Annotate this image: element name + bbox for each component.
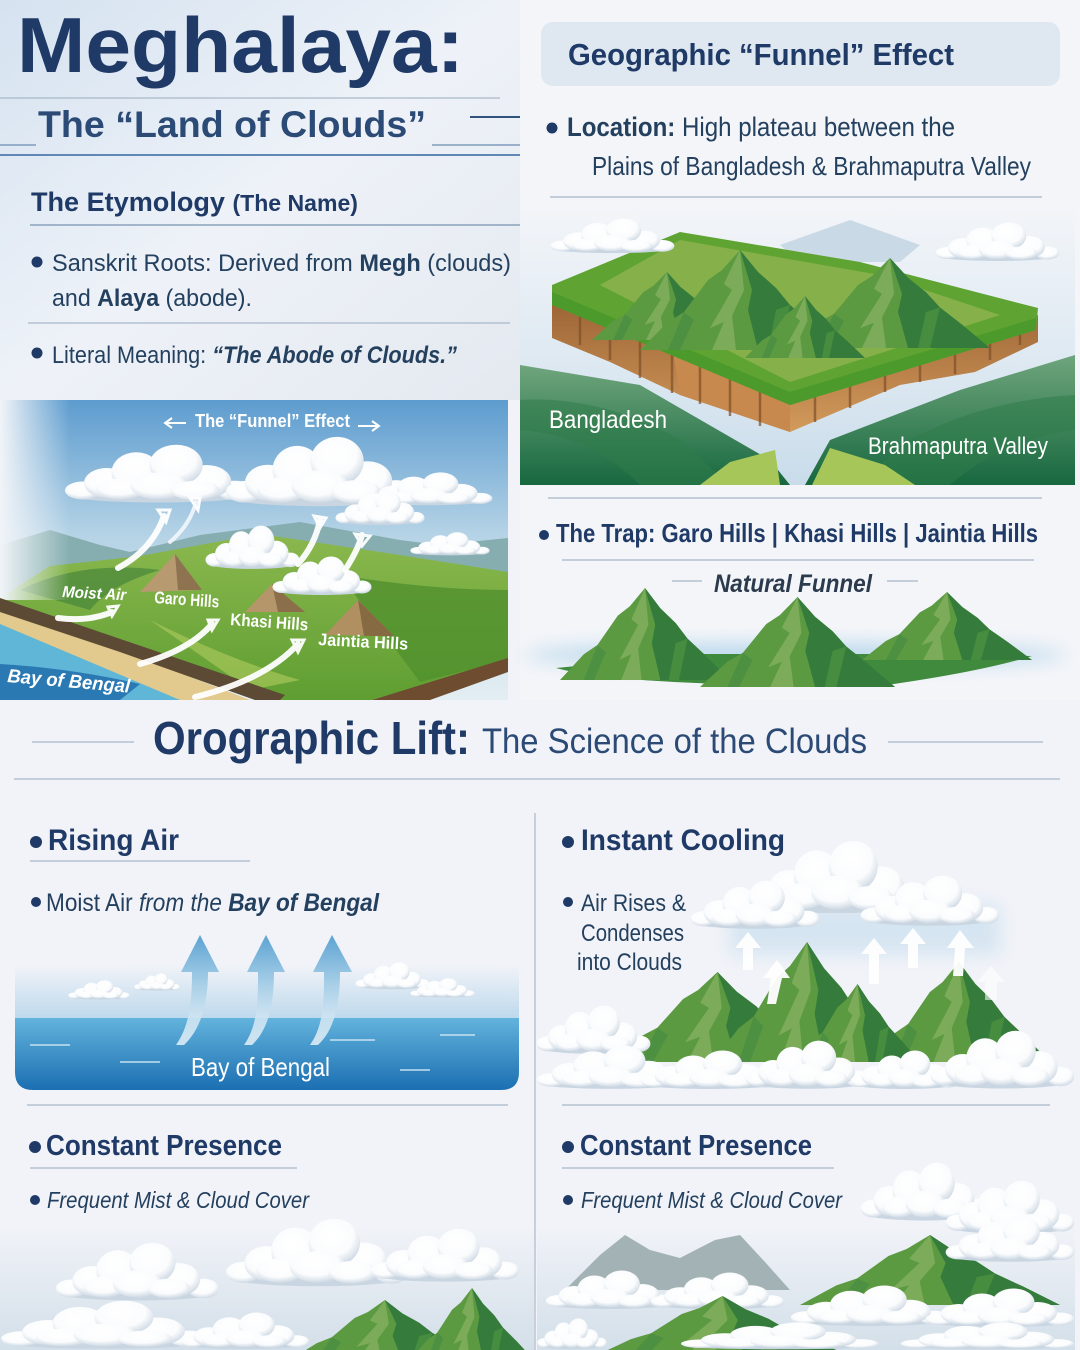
plateau top — [552, 232, 1038, 405]
illustration: misty hills left — [0, 1219, 534, 1350]
arrows: rising air — [176, 935, 352, 1045]
text: air rises: Condenses — [581, 920, 684, 947]
labels: Bangladesh — [549, 406, 667, 434]
cliffs — [552, 300, 1038, 432]
hill labels: Bay of Bengal — [7, 666, 132, 698]
label: bay of bengal: Bay of Bengal — [191, 1052, 330, 1082]
natural funnel label: Natural Funnel — [714, 570, 873, 598]
text: location: Plains of Bangladesh & Brahmaputra Valley — [592, 151, 1031, 181]
text: sanskrit roots: Sanskrit Roots: Derived from Megh (clouds) — [52, 250, 511, 277]
text: sanskrit roots — [32, 250, 511, 312]
bay of bengal banner — [0, 664, 140, 700]
hill labels — [7, 584, 409, 698]
arrows: air rising — [735, 928, 1005, 1004]
illustration: misty hills right — [537, 1163, 1075, 1350]
panel: orographic lift — [0, 700, 1080, 1350]
rocky peaks — [140, 554, 394, 636]
panel: funnel effect illustration — [0, 400, 508, 700]
text: location: Location: High plateau between the — [567, 112, 955, 142]
hill labels: Khasi Hills — [230, 610, 309, 634]
heading bar — [541, 22, 1060, 86]
clouds — [551, 218, 1059, 261]
block: rising air — [15, 824, 519, 1090]
hill labels: Jaintia Hills — [318, 630, 409, 654]
plateau illustration — [520, 205, 1075, 485]
panel: title and etymology — [0, 0, 520, 400]
airflow arrows — [58, 498, 370, 697]
text: location — [546, 112, 1031, 181]
panel: geographic funnel effect — [520, 0, 1080, 700]
text: mist left: Frequent Mist & Cloud Cover — [47, 1187, 310, 1213]
sea and beach — [0, 612, 190, 700]
block: constant presence right — [537, 1130, 1075, 1350]
subtitle: The “Land of Clouds” — [38, 104, 426, 145]
clouds — [65, 437, 492, 595]
funnel label: The “Funnel” Effect — [195, 411, 350, 431]
hill labels: Moist Air — [62, 584, 127, 604]
text: mist right: Frequent Mist & Cloud Cover — [581, 1187, 843, 1213]
natural funnel mountains — [525, 588, 1065, 687]
heading: constant presence right: Constant Presence — [580, 1130, 812, 1162]
text: air rises: into Clouds — [577, 949, 682, 976]
block: constant presence left — [0, 1130, 534, 1350]
far mountain — [780, 220, 920, 262]
lowlands — [520, 365, 790, 485]
text: moist air: Moist Air from the Bay of Bengal — [46, 889, 380, 917]
plateau illustration: Brahmaputra Valley — [868, 433, 1048, 460]
text: air rises — [563, 890, 686, 976]
land surface — [0, 534, 508, 700]
heading: etymology: The Etymology (The Name) — [31, 187, 358, 217]
illustration: mountains and clouds — [537, 841, 1074, 1089]
distant hills — [0, 522, 508, 620]
text: literal meaning: Literal Meaning: “The Abode of Clouds.” — [52, 342, 457, 369]
text: air rises: Air Rises & — [581, 890, 686, 917]
heading: rising air: Rising Air — [48, 824, 179, 857]
block: instant cooling — [537, 824, 1074, 1089]
plateau mountains — [592, 250, 990, 358]
text: sanskrit roots: and Alaya (abode). — [52, 285, 252, 312]
heading: constant presence left: Constant Presence — [46, 1130, 282, 1162]
hill labels: Garo Hills — [154, 588, 220, 612]
section subtitle: The Science of the Clouds — [482, 722, 867, 761]
section title: Orographic Lift: — [153, 712, 470, 764]
illustration: ocean — [15, 962, 519, 1090]
title: Meghalaya: — [17, 1, 464, 89]
cliff — [0, 598, 285, 700]
heading: instant cooling: Instant Cooling — [581, 824, 785, 857]
heading: Geographic “Funnel” Effect — [568, 37, 954, 72]
